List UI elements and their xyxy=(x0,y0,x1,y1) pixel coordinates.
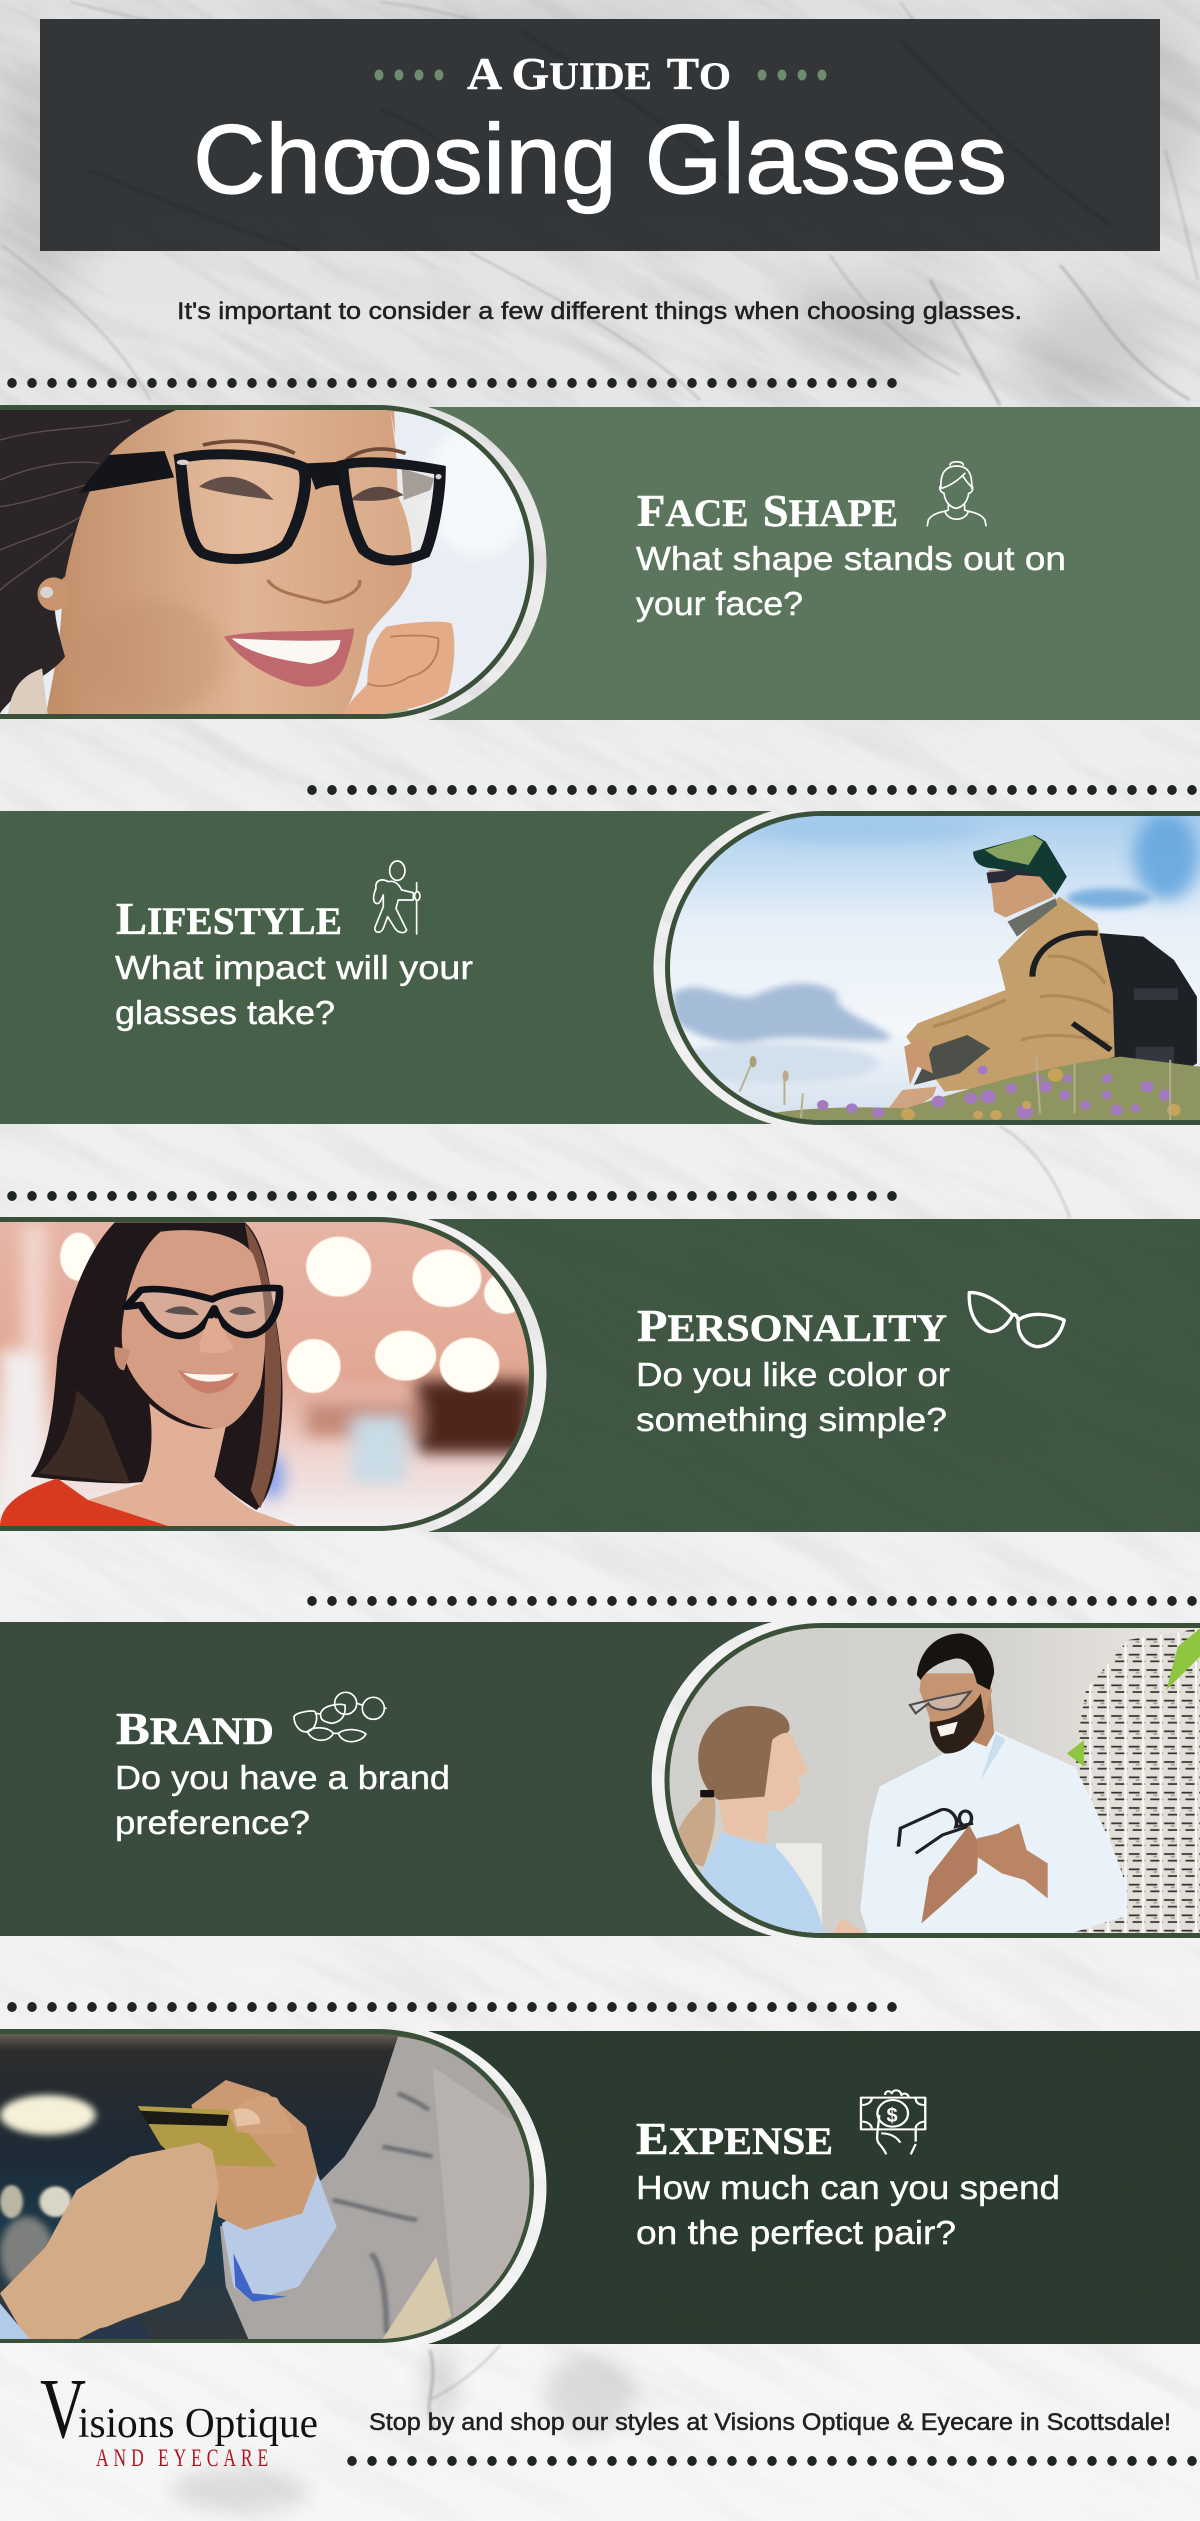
footer call to action: Stop by and shop our styles at Visions Optique & Eyecare in Scottsdale! xyxy=(369,2409,1171,2436)
logo wordmark: V xyxy=(40,2360,86,2456)
body text line 1: What shape stands out on xyxy=(636,541,1066,578)
band xyxy=(0,1622,772,1936)
body text line 1: Do you have a brand xyxy=(115,1760,450,1797)
body text line 2: preference? xyxy=(115,1805,310,1842)
heading: brand: Brand xyxy=(116,1695,274,1757)
glasses bridge between the two o letters xyxy=(358,152,392,157)
panel: lifestyle xyxy=(0,811,1200,1125)
icon: hiker xyxy=(374,861,420,934)
body text line 1: What impact will your xyxy=(115,950,473,987)
logo subline: AND EYECARE xyxy=(96,2444,268,2472)
dotted rule 3 xyxy=(2,1191,902,1201)
heading: expense: Expense xyxy=(636,2105,833,2167)
photo frame xyxy=(0,2029,534,2343)
decorative dots right xyxy=(758,70,826,80)
dotted rule 4 xyxy=(302,1596,1197,1606)
icon: hand holding money xyxy=(861,2090,925,2154)
photo: handing over a credit card xyxy=(0,2032,536,2342)
panel: brand xyxy=(0,1622,1200,1938)
body text line 1: Do you like color or xyxy=(636,1357,950,1394)
band xyxy=(428,1219,1200,1532)
band xyxy=(0,811,772,1124)
band xyxy=(428,2031,1200,2344)
photo frame xyxy=(0,1217,534,1531)
body text line 1: How much can you spend xyxy=(636,2170,1060,2207)
photo frame xyxy=(665,811,1200,1125)
banner panel xyxy=(40,19,1160,251)
heading: lifestyle: Lifestyle xyxy=(116,885,342,947)
banner marble veins xyxy=(90,30,1110,250)
photo: hiker in a field xyxy=(657,813,1200,1123)
body text line 2: on the perfect pair? xyxy=(636,2215,956,2252)
logo wordmark: isions Optique xyxy=(78,2401,318,2447)
logo: Visions Optique and Eyecare xyxy=(40,2360,318,2472)
dollar sign: $ xyxy=(886,2105,898,2127)
photo: optician showing glasses to a customer xyxy=(657,1623,1200,1937)
panel: face shape xyxy=(0,403,1200,723)
heading: face shape: Face Shape xyxy=(637,477,898,539)
body text line 2: something simple? xyxy=(636,1402,947,1439)
title banner xyxy=(40,19,1160,251)
body text line 2: glasses take? xyxy=(115,995,335,1032)
photo frame xyxy=(0,405,534,719)
dotted rule 2 xyxy=(302,785,1197,795)
dotted rule footer xyxy=(342,2456,1197,2466)
photo: woman in cat-eye glasses xyxy=(0,1220,536,1530)
decorative dots left xyxy=(374,70,444,80)
icon: stacked glasses xyxy=(294,1692,387,1742)
heading: choosing glasses: Choosing Glasses xyxy=(193,104,1007,214)
panel: expense xyxy=(0,2029,1200,2344)
band xyxy=(428,407,1200,720)
photo: woman in black glasses xyxy=(0,403,536,723)
body text line 2: your face? xyxy=(636,586,803,623)
dotted rule 1 xyxy=(2,378,902,388)
photo frame xyxy=(664,1623,1200,1938)
intro text: It's important to consider a few different things when choosing glasses. xyxy=(177,298,1022,325)
heading: a guide to: A Guide To xyxy=(467,40,731,102)
heading: personality: Personality xyxy=(637,1292,947,1354)
icon: cat-eye glasses xyxy=(969,1293,1064,1347)
panel: personality xyxy=(0,1217,1200,1532)
dotted rule 5 xyxy=(2,2002,902,2012)
icon: woman face outline xyxy=(927,462,986,526)
